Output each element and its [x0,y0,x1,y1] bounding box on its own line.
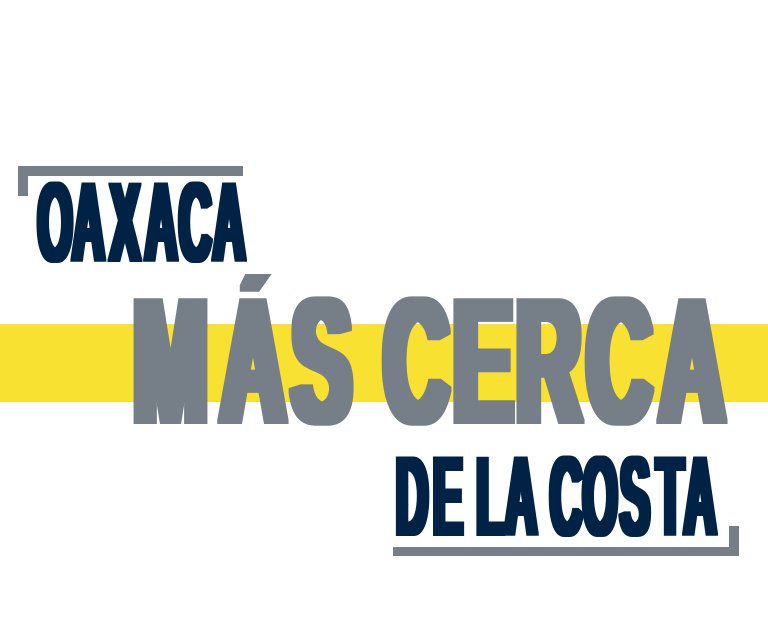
top-left bracket [18,166,243,196]
heading: DE LA COSTA: DE LA COSTA [396,435,716,560]
heading: OAXACA: OAXACA [38,161,245,286]
heading: MÁS CERCA: MÁS CERCA [134,261,724,460]
bottom-right bracket [393,526,739,556]
yellow band [0,324,768,402]
